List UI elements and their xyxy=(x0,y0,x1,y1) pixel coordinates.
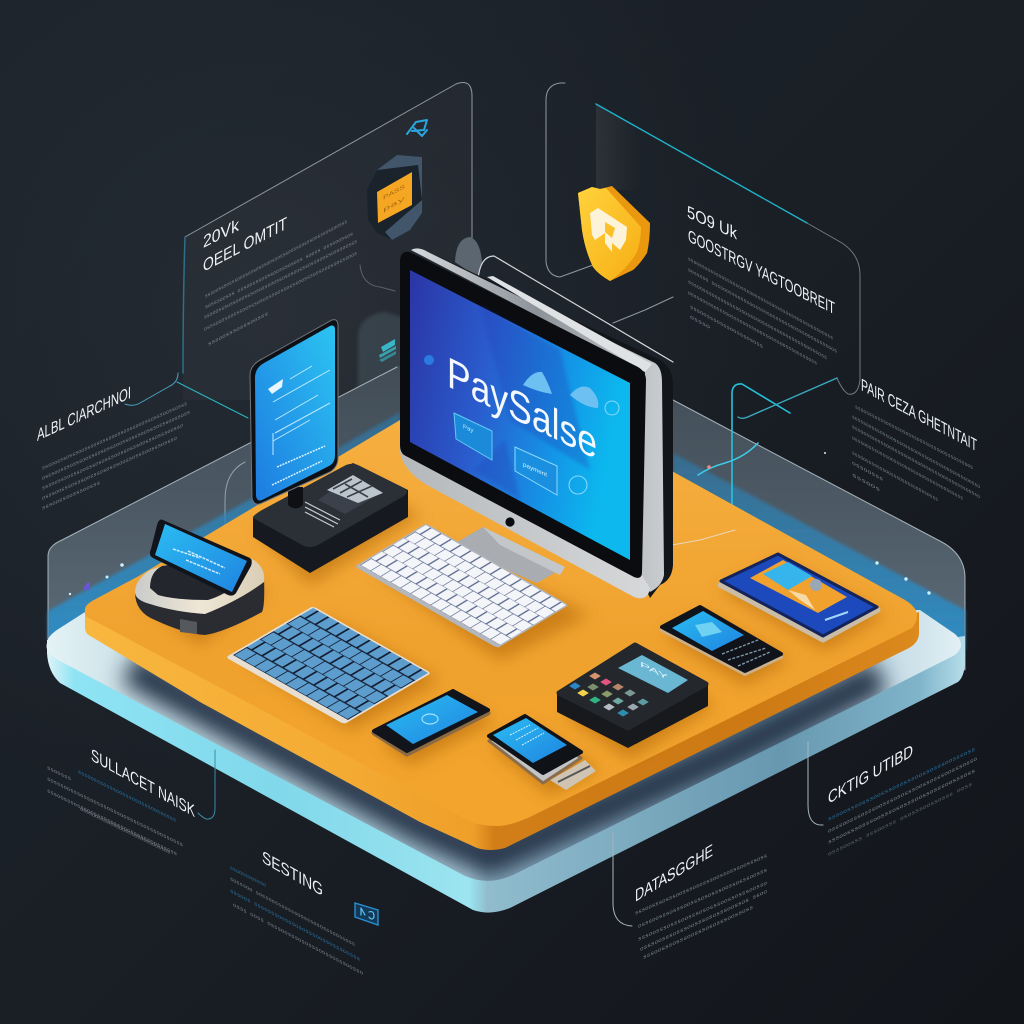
device: card reader phone xyxy=(489,716,596,790)
device shadows xyxy=(140,480,885,795)
text block: bottom left: sosssoosssossoosssosssoosssososssoossosss xyxy=(47,775,183,849)
text block: bottom middle: sssoosssosssoosssososssoossoss xyxy=(643,904,753,961)
heading: left: ALBL CIARCHNOI xyxy=(37,383,131,445)
screen card one xyxy=(454,413,492,460)
text block: bottom centre xyxy=(230,864,363,977)
panel: bottom middle label xyxy=(613,833,768,961)
bezel xyxy=(400,252,646,578)
text block: bottom centre: sosssoo sossoosssosssoosssososssoossoss xyxy=(230,875,355,948)
text block: top left xyxy=(204,218,357,348)
text block: bottom right: sssoosssosssoosssososssoossosssoosssoss xyxy=(828,767,976,846)
data points on wall xyxy=(69,452,931,595)
text block: bottom right: osssoosssosssoosssososssoossosssoosssosso xyxy=(828,755,978,835)
glass base back wall xyxy=(48,312,965,700)
platform side xyxy=(85,610,919,850)
device: blue keyboard xyxy=(226,606,431,724)
blue band left xyxy=(48,412,400,640)
POS keypad xyxy=(570,673,648,716)
device: phone three xyxy=(662,607,781,674)
screen card two: payment xyxy=(523,461,547,479)
heading: bottom centre: SESTING xyxy=(262,846,323,900)
text block: bottom right: osssoosss sssoosss ososssoossosss ooss xyxy=(828,780,973,858)
text block: left: osssoosssosssoosssososssoossosssoosssossso xyxy=(42,434,177,502)
heading: top left: OEEL OMTIT xyxy=(203,213,287,276)
panel: left label xyxy=(37,383,190,512)
monitor back xyxy=(420,248,673,598)
heading: top right: GOOSTRGV YAGTOOBREIT xyxy=(688,226,835,318)
text block: top left: sssoosssosssoosssososssoossosssoosssosssoossosssoosss xyxy=(204,238,357,321)
device: phone one xyxy=(374,691,488,754)
dock phone screen xyxy=(150,520,252,596)
icon: yellow shield xyxy=(578,186,650,281)
panel: top left security xyxy=(125,82,472,418)
glass base lower tier xyxy=(46,610,965,913)
screen xyxy=(410,270,630,560)
text block: bottom middle xyxy=(635,852,768,961)
text block: left: sssoosssosssoosssososssoossosssoosssosssoossosss xyxy=(42,400,187,472)
text block: upper right: sssoosssosssoosssososssoossosssoosssosssoosso xyxy=(852,423,980,500)
text block: upper right: sssoosssosssoosssososssoossosss xyxy=(852,449,938,503)
text block: top left: osssoosssosssoosssososssoossosssoosssosssoossosssoos xyxy=(204,250,357,333)
device: tablet on stand with terminal box xyxy=(250,320,408,573)
screen clouds xyxy=(523,372,598,408)
panel: top right security xyxy=(546,83,860,394)
stand xyxy=(457,527,565,583)
text block: bottom left: sssoosssosssoosssososssoossosssoosssoss xyxy=(47,787,177,858)
panel: bottom left label xyxy=(47,744,215,858)
blue band right xyxy=(673,453,965,650)
screen card two xyxy=(515,447,557,495)
icon: dark shield with card: pay xyxy=(383,195,405,214)
text block: left: osssoosssosssoosssososssoossosssoosssosssoossoss xyxy=(42,409,190,482)
device: white keyboard xyxy=(355,523,569,648)
screen card one: Pay xyxy=(463,423,474,435)
text block: left: sssoosssosssoosss xyxy=(42,479,100,512)
icon: dark shield with card xyxy=(367,155,422,240)
heading: bottom right: CKTIG UTIBD xyxy=(828,740,913,808)
text block: bottom centre: sssoos sssosssoosssososssoossosssoosss xyxy=(230,887,360,963)
text block: top left: sssoosssosssoosssososssoossosssoosssosssoossosssoosss xyxy=(205,218,347,300)
heading: top right: 5O9 Uk xyxy=(687,202,737,243)
text block: bottom right: sssoosssosssoosssososssoossosssoosssoss xyxy=(828,746,975,823)
tablet screen xyxy=(250,320,338,504)
box base xyxy=(253,463,408,573)
device: monitor xyxy=(400,237,735,598)
icon: dark shield with card: PASS xyxy=(383,183,405,202)
text block: upper right: ossoosss xyxy=(852,459,884,483)
widget: small cyan bars behind monitor xyxy=(379,339,396,362)
device: phone dock xyxy=(135,520,264,635)
device: POS terminal: PAY xyxy=(640,659,668,682)
text block: top right: osssoosssosssoosssososssoossosssoosssosssooss xyxy=(688,289,817,367)
text block: bottom middle: sssoosssosssoosssososssoossosssoosso xyxy=(638,879,768,943)
text block: top right: ossso xyxy=(690,313,711,331)
text block: bottom middle: osssoosssosssoosssososssoossos ssoo xyxy=(640,888,768,953)
base tier top xyxy=(46,610,961,881)
icon: cyan glyph xyxy=(407,120,427,136)
text block: upper right: osssoosssosssoosssososssoossosssoosssoss xyxy=(852,434,963,502)
orange platform xyxy=(85,365,919,850)
back blob and cable xyxy=(455,237,482,278)
chin xyxy=(400,445,650,598)
text block: bottom left: osssoosssosssoosssososssoossos xyxy=(80,805,170,856)
heading: bottom middle: DATASGGHE xyxy=(635,840,713,906)
text block: bottom left: sssoosssosssoosssososssoossosss xyxy=(78,768,176,824)
text block: top right: ssoosssosssoosssososssoossosssoosssosssoossosssoosss xyxy=(688,255,833,342)
text block: top right: sssoosssosssoosssososs xyxy=(690,303,763,350)
device: tablet xyxy=(720,554,878,640)
text block: top left: sosssoosss ossoosssosssoosssososs sooss osssoossos xyxy=(205,230,353,311)
title on screen: PaySalse xyxy=(447,347,597,469)
heading: top left: 20Vk xyxy=(203,214,240,252)
text block: upper right: sssoos xyxy=(852,471,881,494)
text block: top left: sssoosssosssoosss xyxy=(208,310,268,348)
shadow under platform xyxy=(130,668,880,858)
text block: upper right: ssoosssosssoosssososssoossosssoosssosssoos xyxy=(855,403,973,471)
panel: upper right label xyxy=(852,375,980,503)
text block: bottom left: ssoosss xyxy=(47,764,71,782)
text block: top right: sssoosssosssoosssososssoossosssoosssosssoossoss xyxy=(688,278,827,362)
text block: bottom centre: osss ooss osssoosssososssoossosssoosso xyxy=(233,901,363,977)
panel: bottom centre label xyxy=(230,846,378,977)
text block: bottom middle: sssoosssosssoosssososssoossosssoosssoss xyxy=(635,852,767,917)
heading: bottom left: SULLACET NAISK xyxy=(91,744,195,821)
panel: bottom right label xyxy=(808,740,978,858)
text block: bottom centre: ssoosssossso xyxy=(230,864,266,889)
text block: left: sssoosssosssoosssososssoossosssoosssosssoosso xyxy=(42,422,183,492)
teal signal lines xyxy=(698,378,837,510)
text block: top right: sosssoo sossoosssosssoosssososssoossosssoossosssoos xyxy=(688,266,837,355)
heading: top right xyxy=(687,202,835,318)
platform top xyxy=(85,365,917,826)
icon: blue tag xyxy=(355,903,378,925)
text block: bottom middle: osssoosssosssoosssososssoossosssoosss xyxy=(638,866,767,930)
text block: upper right: sosssoosssossoosssosssoosssososssoossosssoosso xyxy=(852,413,980,490)
device: POS terminal xyxy=(557,645,708,748)
silver rim xyxy=(411,248,664,592)
text block: bottom right xyxy=(828,746,978,858)
text block: left xyxy=(42,400,190,512)
POS screen xyxy=(618,655,688,693)
